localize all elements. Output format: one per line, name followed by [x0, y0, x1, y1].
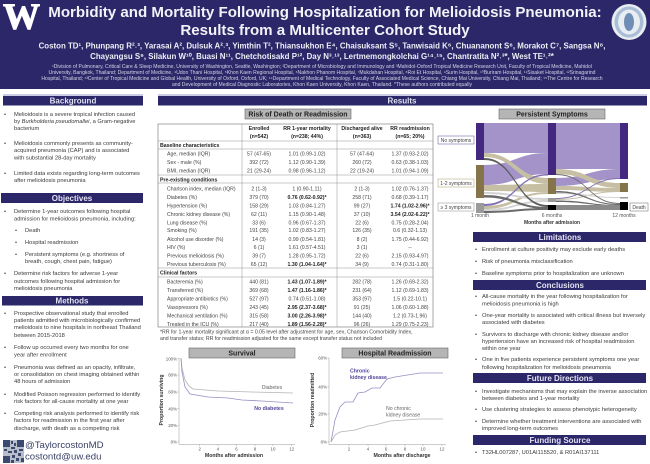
text: objectives bullets: Hospital readmission	[25, 240, 78, 246]
axis labels: 12	[440, 446, 445, 452]
table section: clinical factors: 217 (40)	[249, 322, 269, 328]
text: limitations bullets: Enrollment at culture positivity may exclude early deaths	[482, 247, 625, 253]
table section: baseline characteristics: 260 (72)	[352, 160, 372, 166]
text: objectives bullets: breath, cough, chest pain, fatigue)	[25, 259, 112, 265]
text: background bullets: •	[4, 141, 6, 147]
axis labels: 2	[348, 446, 351, 452]
table section: clinical factors: 1.26 (0.69-2.32)	[392, 280, 429, 286]
legend: death: Death	[632, 205, 646, 211]
table section: clinical factors: 315 (58)	[249, 314, 269, 320]
table section: clinical factors: 440 (81)	[249, 280, 269, 286]
text: conclusions bullets	[475, 294, 645, 371]
text: objectives bullets: •	[15, 240, 17, 246]
curve: no diabetes: No diabetes	[254, 406, 284, 412]
text: background bullets: •	[4, 171, 6, 177]
text: future directions bullets	[475, 389, 647, 432]
affiliations: ¹Division of Pulmonary, Critical Care & Sleep Medicine, University of Washington, Seattle, Washington; ²Department of Microbiology and Immunology and ³Mahidol-Oxford Tropical Medicine Research Unit, Faculty of Tropical Medicine, Mahidol	[52, 64, 592, 70]
table section: clinical factors: Clinical factors	[160, 271, 197, 277]
table section: clinical factors: 144 (40)	[352, 314, 372, 320]
table section: pre-existing conditions: 39 (7)	[252, 254, 266, 260]
axis labels: 2	[198, 446, 201, 452]
table section: clinical factors: 1.5 (0.22-10.1)	[393, 297, 427, 303]
text: future directions bullets: •	[475, 389, 477, 395]
heading: objectives	[1, 193, 143, 203]
table section: clinical factors: 1.43 (1.07-1.89)*	[288, 280, 327, 286]
authors: Chayangsu S⁹, Silakun W¹⁰, Buasi N¹¹, Chetchotisakd P¹², Day N³˒¹³, Lertmemongkolchai G¹⁴˒¹⁵, Chantratita N²˒³*, West TE¹˒²*	[90, 52, 555, 61]
table section: clinical factors: 527 (97)	[249, 297, 269, 303]
text: methods bullets: year after enrollment	[14, 352, 67, 358]
table section: clinical factors: 2.95 (2.37-3.68)*	[288, 305, 327, 311]
heading: future directions	[473, 373, 646, 383]
text: limitations bullets: •	[475, 271, 477, 277]
table section: pre-existing conditions: 0.6 (0.32-1.13)	[393, 228, 427, 234]
axis labels: 40%	[318, 385, 327, 390]
table section: pre-existing conditions: 258 (71)	[352, 195, 372, 201]
table section: pre-existing conditions: 65 (12)	[251, 262, 267, 268]
panel: background	[3, 94, 143, 184]
text: conclusions bullets: hypertension have an increased risk of hospital readmission	[482, 339, 634, 345]
text: objectives bullets: •	[15, 228, 17, 234]
authors	[39, 42, 605, 61]
text: funding: T32HL007287, U01AI115520, & R01AI137111	[482, 450, 599, 456]
curve: chronic kidney disease: Chronic	[350, 368, 370, 374]
text: objectives bullets: Determine 1-year outcomes following hospital	[14, 209, 130, 215]
heading: limitations	[473, 232, 646, 242]
table section: baseline characteristics: 1.01 (0.99-1.02)	[289, 152, 326, 158]
axis labels	[471, 213, 636, 226]
text: conclusions bullets: within one year	[481, 346, 521, 352]
table section: pre-existing conditions: 22 (6)	[355, 220, 369, 226]
panel: hospital readmission chart: Months after discharge	[373, 453, 431, 459]
text: objectives bullets: admission for melioidosis pneumonia, including:	[14, 216, 136, 222]
text: methods bullets: Pneumonia was defined as an opacity, infiltrate,	[14, 365, 136, 371]
text: methods bullets: 48 hours of admission	[14, 379, 70, 385]
affiliations: University, Bangkok, Thailand; Department of Medicine, ⁴Udon Thani Hospital, ⁵Khon Kaen Regional Hospital, ⁶Nakhon Phanom Hospital, ⁷Mukdahan Hospital, ⁸Roi Et Hospital, ⁹Surin Hospital, ¹⁰Buriram Hospital, ¹¹Sisaket Hospital, ¹²Srinagarind	[49, 70, 596, 76]
title: Results from a Multicenter Cohort Study	[180, 22, 470, 39]
axis labels: 60%	[318, 356, 327, 361]
table section: pre-existing conditions: Charlson index, median (IQR)	[167, 186, 236, 192]
table section: pre-existing conditions: 1 (0.90-1.11)	[292, 186, 322, 192]
table section: clinical factors: 369 (68)	[249, 288, 269, 294]
table section: pre-existing conditions: 1.28 (0.95-1.72)	[289, 254, 326, 260]
panel: methods	[2, 296, 143, 432]
table section: pre-existing conditions: 0.99 (0.54-1.81)	[289, 237, 326, 243]
panel: survival chart: Months after admission	[205, 453, 263, 459]
table section: pre-existing conditions: Lung disease (%)	[167, 220, 208, 226]
text: methods bullets: Modified Poisson regression performed to identify	[14, 392, 140, 398]
text: objectives bullets	[4, 209, 136, 292]
table section: baseline characteristics	[160, 143, 429, 175]
text: methods bullets: Competing risk analysis performed to identify risk	[14, 411, 139, 417]
heading: methods	[2, 296, 143, 306]
curve: no chronic kidney disease: kidney disease	[386, 412, 420, 418]
flows: 1 month to 6 months	[484, 123, 548, 213]
heading: conclusions	[473, 280, 646, 290]
text: future directions bullets: •	[475, 419, 477, 425]
legend: 1-2 symptoms	[438, 179, 474, 187]
table section: baseline characteristics: 57 (47-64)	[350, 152, 374, 158]
table section: pre-existing conditions: 6 (1)	[254, 245, 265, 251]
heading: objectives: Objectives	[52, 194, 93, 203]
text: conclusions bullets: One in five patients experience persistent symptoms one year	[482, 357, 639, 363]
text: limitations bullets: Risk of pneumonia misclassification	[482, 259, 573, 265]
text: methods bullets: •	[4, 311, 6, 317]
table section: pre-existing conditions: 1.61 (0.57-4.51)	[289, 245, 326, 251]
text: objectives bullets: Persistent symptoms (e.g. shortness of	[25, 252, 125, 258]
table section: baseline characteristics: 1.37 (0.93-2.02)	[392, 152, 429, 158]
table header: RR readmission	[390, 126, 430, 132]
authors: Coston TD¹, Phunpang R²˒³, Yarasai A², Dulsuk A²˒³, Yimthin T², Thiansukhon E⁴, Chaisuksant S⁵, Tanwisaid K⁶, Chuananont S⁶, Morakot C⁷, Sangsa N⁸,	[39, 42, 605, 50]
table section: clinical factors: Transferred (%)	[167, 288, 203, 294]
text: conclusions bullets: •	[475, 294, 477, 300]
heading: funding source	[473, 435, 646, 445]
table section: pre-existing conditions: 14 (3)	[252, 237, 266, 243]
text: methods bullets: risk factors for all-cause mortality at one year	[14, 399, 128, 405]
text: limitations bullets: •	[475, 247, 477, 253]
header banner	[0, 0, 650, 89]
table section: pre-existing conditions: 3 (1)	[357, 245, 368, 251]
table section: pre-existing conditions: Hypertension (%)	[167, 204, 207, 210]
table section: pre-existing conditions: Previous melioidosis (%)	[167, 254, 224, 260]
table section: pre-existing conditions: 2 (1-3)	[354, 186, 370, 192]
text: background bullets: acquired pneumonia (CAP) and is associated	[14, 148, 129, 154]
table section: pre-existing conditions: 0.75 (0.28-2.04)	[392, 220, 429, 226]
affiliations	[41, 64, 603, 88]
text: background bullets: Limited data exists regarding long-term outcomes	[14, 171, 140, 177]
text: objectives bullets: Death	[25, 228, 40, 234]
table section: pre-existing conditions: 8 (2)	[357, 237, 368, 243]
table section: pre-existing conditions: 0.74 (0.31-1.80)	[392, 262, 429, 268]
text: limitations bullets: •	[475, 259, 477, 265]
text: conclusions bullets: •	[475, 357, 477, 363]
text: objectives bullets: outcomes following hospital admission for	[14, 279, 120, 285]
text: methods bullets: Follow up occurred every two months for one	[14, 345, 129, 351]
axis labels: 0%	[171, 440, 177, 445]
table section: pre-existing conditions: 37 (10)	[354, 212, 370, 218]
table header: (n=542)	[250, 134, 268, 140]
text: objectives bullets: •	[4, 271, 6, 277]
table footnote	[160, 330, 413, 342]
axis labels: 20%	[168, 423, 177, 428]
subheading: risk of death or readmission: Risk of Death or Readmission	[248, 112, 348, 118]
text: background bullets	[4, 112, 140, 184]
table section: baseline characteristics: BMI, median (IQR)	[167, 169, 211, 175]
subheading: persistent symptoms	[499, 109, 605, 119]
axes	[328, 358, 446, 446]
text: methods bullets: •	[4, 392, 6, 398]
subheading: risk of death or readmission	[245, 109, 351, 119]
axis labels: Months after admission	[524, 220, 580, 226]
table section: clinical factors: 353 (97)	[352, 297, 372, 303]
panel: survival chart	[159, 348, 295, 459]
table section: pre-existing conditions: Previous tuberculosis (%)	[167, 262, 226, 268]
table section: baseline characteristics: 392 (72)	[249, 160, 269, 166]
logo: university seal	[612, 4, 646, 40]
table section: pre-existing conditions: 158 (29)	[249, 204, 269, 210]
table section: pre-existing conditions: 1.75 (0.44-6.92)	[392, 237, 429, 243]
heading: funding source: Funding Source	[530, 436, 591, 445]
nodes: 6 months	[548, 123, 556, 210]
legend: 3 or more symptoms: ≥ 3 symptoms	[440, 205, 472, 211]
curve: no chronic kidney disease: No chronic	[386, 406, 411, 412]
table section: pre-existing conditions: 99 (27)	[354, 204, 370, 210]
table section: clinical factors: 243 (45)	[249, 305, 269, 311]
text: contact: costontd@uw.edu	[25, 452, 101, 462]
table section: clinical factors: 1.89 (1.56-2.28)*	[288, 322, 327, 328]
nodes: 12 months	[620, 123, 628, 210]
axis labels: 6	[235, 446, 238, 452]
text: background bullets: Melioidosis is a severe tropical infection caused	[14, 112, 135, 118]
axis labels: 6	[385, 446, 388, 452]
table header: (n=238; 44%)	[291, 134, 323, 140]
text: methods bullets: factors for readmission in the first year after	[14, 418, 125, 424]
table section: baseline characteristics: Baseline characteristics	[160, 143, 220, 149]
axis labels: 100%	[166, 356, 177, 361]
chart: sankey of persistent symptoms	[438, 123, 648, 226]
table section: clinical factors: 1.2 (0.73-1.96)	[393, 314, 427, 320]
text: conclusions bullets: associated with diabetes	[482, 320, 545, 326]
text: contact	[25, 440, 104, 462]
text: conclusions bullets: Survivors to discharge with chronic kidney disease and/or	[482, 332, 628, 338]
text: limitations bullets	[475, 247, 625, 277]
text: methods bullets: discharge, with death as a competing risk	[14, 426, 120, 432]
table section: baseline characteristics: Age, median (IQR)	[167, 152, 211, 158]
heading: background: Background	[50, 97, 96, 106]
axis labels: 1 month	[471, 213, 489, 219]
contact block	[3, 440, 104, 463]
title: Morbidity and Mortality Following Hospitalization for Melioidosis Pneumonia:	[48, 4, 602, 21]
text: funding: •	[475, 450, 477, 456]
table section: pre-existing conditions: --	[408, 245, 412, 251]
table section: clinical factors: 231 (64)	[352, 288, 372, 294]
curve: no chronic kidney disease	[331, 406, 443, 442]
table section: baseline characteristics: 22 (19-24)	[350, 169, 374, 175]
table section: clinical factors: 0.74 (0.51-1.08)	[289, 297, 326, 303]
heading: conclusions: Conclusions	[536, 281, 585, 290]
table section: pre-existing conditions: Diabetes (%)	[167, 195, 197, 201]
subheading: survival: Survival	[228, 350, 256, 358]
text: background bullets: bacterium	[14, 126, 39, 132]
table section: clinical factors: Bacteremia (%)	[167, 280, 203, 286]
panel: conclusions	[473, 280, 646, 371]
subheading: hospital readmission: Hospital Readmission	[358, 350, 432, 358]
text: methods bullets: •	[4, 365, 6, 371]
affiliations: and Development of Medical Diagnostic Laboratories, Khon Kaen University, Khon Kaen, Thailand. *These authors contributed equally	[172, 82, 472, 88]
table header	[249, 126, 430, 140]
flows: 6 months to 12 months	[556, 123, 620, 210]
title	[48, 4, 602, 39]
panel: objectives	[1, 193, 143, 292]
text: methods bullets: Prospective observational study that enrolled	[14, 311, 128, 317]
table section: pre-existing conditions: 1.02 (0.83-1.27)	[289, 228, 326, 234]
table section: pre-existing conditions: 62 (11)	[251, 212, 267, 218]
table section: baseline characteristics: 0.63 (0.38-1.03)	[392, 160, 429, 166]
table section: pre-existing conditions: 379 (70)	[249, 195, 269, 201]
text: future directions bullets: Use clustering strategies to assess phenotypic heterogeneity	[482, 407, 637, 413]
table header: Discharged alive	[341, 126, 383, 132]
text: methods bullets: •	[4, 411, 6, 417]
table section: clinical factors: 1.29 (0.75-2.23)	[392, 322, 429, 328]
table section: pre-existing conditions	[160, 178, 430, 268]
table section: pre-existing conditions: 0.96 (0.67-1.37)	[289, 220, 326, 226]
axis labels: 80%	[168, 373, 177, 378]
curve: chronic kidney disease	[331, 368, 443, 442]
table section: pre-existing conditions: Chronic kidney disease (%)	[167, 212, 230, 218]
legend: 3 or more symptoms	[438, 203, 474, 211]
table section: pre-existing conditions: 2 (1-3)	[251, 186, 267, 192]
text: methods bullets: melioidosis to nine hospitals in northeast Thailand	[14, 325, 141, 331]
heading: future directions: Future Directions	[527, 374, 594, 383]
axis labels: 20%	[318, 412, 327, 417]
panel: hospital readmission chart	[310, 348, 448, 459]
table header: Enrolled	[249, 126, 269, 132]
text: background bullets: Melioidosis commonly presents as community-	[14, 141, 133, 147]
text: methods bullets: or consolidation on chest imaging obtained within	[14, 372, 139, 378]
table section: pre-existing conditions: Pre-existing conditions	[160, 178, 217, 184]
table header: (n=363)	[353, 134, 371, 140]
text: future directions bullets: improved long-term outcomes	[482, 426, 558, 432]
table section: pre-existing conditions: 34 (9)	[355, 262, 369, 268]
table section: clinical factors: Mechanical ventilation (%)	[167, 314, 228, 320]
table section: pre-existing conditions: HIV (%)	[167, 245, 185, 251]
text: objectives bullets: Determine risk factors for adverse 1-year	[14, 271, 118, 277]
table section: baseline characteristics: 21 (29-24)	[247, 169, 271, 175]
axis labels: 4	[217, 446, 220, 452]
text: future directions bullets: between diabetes and 1-year mortality	[482, 396, 580, 402]
table section: clinical factors: 96 (26)	[354, 322, 370, 328]
text: conclusions bullets: One-year mortality is associated with critical illness but inversely	[482, 313, 645, 319]
affiliations: Hospital, Thailand; ¹³Center of Tropical Medicine and Global Health, University of Oxford, Oxford, UK; ¹⁴Department of Medical Technology, Faculty of Associated Medical Science, Chiang Mai University, Chiang Mai, Thailand; ¹⁵The Centre for Research	[41, 76, 603, 82]
table section: pre-existing conditions: 1.74 (1.02-2.96)*	[391, 204, 430, 210]
table header: (n=65; 20%)	[396, 134, 425, 140]
nodes: 1 month	[476, 123, 484, 213]
legend: death	[630, 203, 648, 211]
text: objectives bullets: melioidosis pneumonia	[14, 286, 73, 292]
table section: clinical factors: Appropriate antibiotics (%)	[167, 297, 228, 303]
table section: pre-existing conditions: 1.02 (0.76-1.37)	[392, 186, 429, 192]
text: background bullets: •	[4, 112, 6, 118]
text: conclusions bullets: •	[475, 313, 477, 319]
axis labels: 10	[271, 446, 276, 452]
axis labels: 10	[421, 446, 426, 452]
text: methods bullets: patients admitted with microbiologically confirmed	[14, 318, 140, 324]
subheading: persistent symptoms: Persistent Symptoms	[516, 112, 588, 118]
axis labels	[166, 356, 295, 452]
text: methods bullets	[4, 311, 141, 432]
icon: QR code	[3, 440, 24, 463]
text: objectives bullets: •	[15, 252, 17, 258]
table footnote: *RR for 1-year mortality significant at α = 0.05 level after adjustment for age, sex, Charlson Comorbidity Index,	[160, 330, 413, 336]
table section: pre-existing conditions: 1.30 (1.04-1.64)*	[288, 262, 327, 268]
text: future directions bullets: Determine whether treatment interventions are associated with	[482, 419, 641, 425]
curve: diabetes: Diabetes	[262, 385, 283, 391]
axis labels: 8	[404, 446, 407, 452]
table: risk factors	[158, 124, 433, 328]
table section: baseline characteristics: 1.01 (0.94-1.09)	[392, 169, 429, 175]
table section: clinical factors: 3.00 (2.26-3.98)*	[288, 314, 327, 320]
axis labels: 6 months	[542, 213, 563, 219]
panel: future directions	[473, 373, 647, 432]
table section: clinical factors: 1.47 (1.16-1.86)*	[288, 288, 327, 294]
text: methods bullets: •	[4, 345, 6, 351]
table section: pre-existing conditions: 3.54 (2.02-6.22)*	[391, 212, 430, 218]
text: future directions bullets: Investigate mechanisms that may explain the inverse association	[482, 389, 647, 395]
table section: pre-existing conditions: 33 (6)	[252, 220, 266, 226]
table section: clinical factors: Treated in the ICU (%)	[167, 322, 219, 328]
axis labels: 12	[289, 446, 295, 452]
table section: pre-existing conditions: Alcohol use disorder (%)	[167, 237, 224, 243]
table section: clinical factors: Vasopressors (%)	[167, 305, 208, 311]
text: future directions bullets: •	[475, 407, 477, 413]
axis labels: 4	[367, 446, 370, 452]
heading: limitations: Limitations	[539, 233, 582, 242]
axis labels: 60%	[168, 390, 177, 395]
panel: funding source	[473, 435, 646, 456]
table section: clinical factors	[160, 271, 429, 328]
legend: no symptoms	[438, 136, 474, 144]
text: contact: @TaylorcostonMD	[25, 440, 104, 451]
table footnote: and transfer status; RR for readmission adjusted for the same except transfer status not included	[160, 336, 382, 342]
table section: baseline characteristics: Sex - male (%)	[167, 160, 202, 166]
axis labels	[318, 356, 445, 452]
text: conclusions bullets: melioidosis pneumonia is high	[482, 302, 559, 308]
text: limitations bullets: Baseline symptoms prior to hospitalization are unknown	[482, 271, 624, 277]
table section: pre-existing conditions: 22 (6)	[355, 254, 369, 260]
table section: pre-existing conditions: 126 (35)	[352, 228, 372, 234]
table header: RR 1-year mortality	[283, 126, 331, 132]
table section: clinical factors: 1.06 (0.60-1.88)	[392, 305, 429, 311]
text: background bullets: after melioidosis pneumonia	[14, 178, 86, 184]
table section: clinical factors: 1.12 (0.69-1.83)	[392, 288, 429, 294]
table section: pre-existing conditions: Smoking (%)	[167, 228, 197, 234]
heading: results: Results	[388, 97, 417, 106]
panel: survival chart: Proportion surviving	[159, 374, 165, 426]
axis labels: 0%	[321, 440, 327, 445]
text: conclusions bullets: All-cause mortality in the year following hospitalization for	[482, 294, 628, 300]
axis labels: 40%	[168, 406, 177, 411]
table section: baseline characteristics: 1.12 (0.90-1.39)	[289, 160, 326, 166]
table section: pre-existing conditions: 2.15 (0.93-4.97)	[392, 254, 429, 260]
panel: limitations	[473, 232, 646, 277]
panel: hospital readmission chart: Proportion readmitted	[310, 373, 316, 427]
table section: pre-existing conditions: 191 (35)	[249, 228, 269, 234]
text: conclusions bullets: •	[475, 332, 477, 338]
table section: pre-existing conditions: 0.68 (0.39-1.17)	[392, 195, 429, 201]
table section: baseline characteristics: 57 (47-65)	[247, 152, 271, 158]
text: methods bullets: between 2015-2018	[14, 333, 65, 339]
heading: methods: Methods	[56, 297, 89, 306]
table section: pre-existing conditions: 0.76 (0.62-0.92)*	[288, 195, 327, 201]
text: background bullets: with substantial 28-day mortality	[13, 156, 96, 162]
table section: pre-existing conditions: 1.15 (0.90-1.48)	[289, 212, 326, 218]
table section: clinical factors: 91 (25)	[354, 305, 370, 311]
curve: chronic kidney disease: kidney disease	[350, 375, 387, 381]
axis labels: 12 months	[612, 213, 636, 219]
heading: results	[158, 94, 647, 106]
legend: no symptoms: No symptoms	[441, 138, 472, 144]
axis labels: 8	[254, 446, 257, 452]
table section: clinical factors: 282 (78)	[352, 280, 372, 286]
table section: pre-existing conditions: 1.03 (0.84-1.27)	[289, 204, 326, 210]
axes	[178, 358, 295, 446]
text: background bullets: by Burkholderia pseudomallei, a Gram-negative	[14, 119, 135, 125]
text: conclusions bullets: following hospitalization for melioidosis pneumonia	[482, 365, 612, 371]
text: objectives bullets: •	[4, 209, 6, 215]
table section: baseline characteristics: 0.98 (0.96-1.12)	[289, 169, 326, 175]
legend: 1-2 symptoms: 1-2 symptoms	[440, 181, 472, 187]
